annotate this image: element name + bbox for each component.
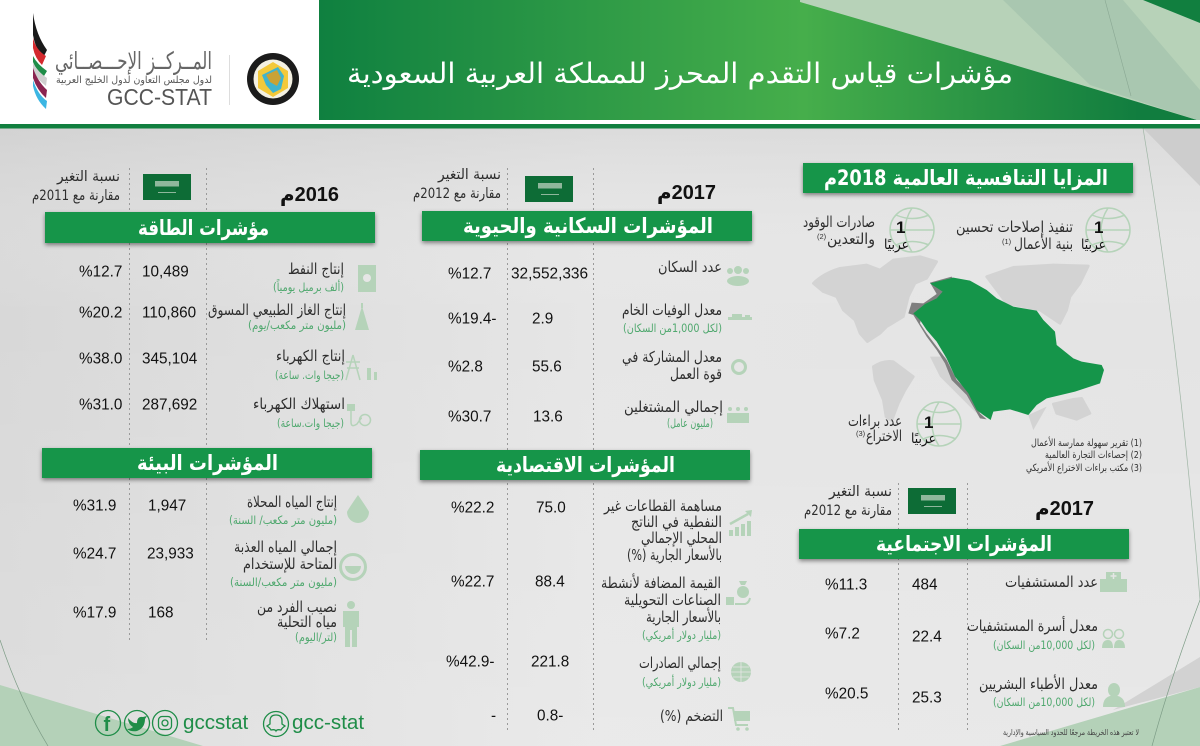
callout: patents xyxy=(848,402,961,447)
row: inflation xyxy=(491,707,750,731)
change label: نسبة التغير xyxy=(437,167,501,183)
row: fresh water: %24.7 xyxy=(73,546,116,562)
banner xyxy=(45,212,375,243)
panel: population and vital indicators xyxy=(413,167,752,431)
row: total employed: (مليون عامل) xyxy=(667,416,713,431)
logo latin name: GCC-STAT xyxy=(107,84,212,110)
row: desalinated water: (مليون متر مكعب/ السنة) xyxy=(229,513,337,528)
year: 2017م xyxy=(1035,498,1094,520)
row: non-oil sectors: المحلي الإجمالي xyxy=(641,529,722,548)
row: electricity consumption: استهلاك الكهرباء xyxy=(253,395,345,413)
row: natural gas xyxy=(79,301,369,333)
callout: business reforms xyxy=(956,208,1130,253)
banner xyxy=(42,448,372,478)
row: hospitals: %11.3 xyxy=(825,576,867,594)
icon: flag xyxy=(908,488,956,514)
callout: patents: الاختراع xyxy=(866,427,902,445)
callout: patents: عدد براءات xyxy=(848,412,902,430)
footnotes xyxy=(1026,436,1142,474)
row: fresh water: 23,933 xyxy=(147,546,194,562)
header band xyxy=(0,0,1200,128)
row: death rate: معدل الوفيات الخام xyxy=(622,301,722,319)
banner xyxy=(420,450,750,480)
row: electricity consumption: 287,692 xyxy=(142,396,197,414)
callout: fuel and mining exports: عربيًا xyxy=(884,237,909,253)
footnotes: (3) مكتب براءات الاختراع الأمريكي xyxy=(1026,461,1142,474)
row: oil production: %12.7 xyxy=(79,264,122,280)
panel: global competitive advantages xyxy=(803,163,1142,474)
row: electricity production: 345,104 xyxy=(142,350,198,368)
year: 2016م xyxy=(280,184,339,206)
row: population: %12.7 xyxy=(448,266,491,282)
row: death rate: 2.9 xyxy=(532,310,553,328)
row: value added: القيمة المضافة لأنشطة xyxy=(601,573,721,592)
row: per capita: مياه التحلية xyxy=(277,613,337,631)
callout: business reforms: (1) xyxy=(1002,237,1012,246)
row: desalinated water xyxy=(73,493,369,528)
row: population: 32,552,336 xyxy=(511,266,588,282)
row: physicians: 25.3 xyxy=(912,690,942,706)
row: electricity production: (جيجا وات. ساعة) xyxy=(275,368,344,383)
icon: facebook xyxy=(96,710,120,736)
row: exports: 221.8 xyxy=(531,654,569,670)
row: hospitals xyxy=(825,572,1127,594)
row: value added: (مليار دولار أمريكي) xyxy=(642,627,721,643)
change label xyxy=(32,169,120,204)
row: hospital beds: 22.4 xyxy=(912,628,942,646)
row: inflation: - xyxy=(491,708,496,724)
row: electricity consumption: %31.0 xyxy=(79,396,122,414)
row: non-oil sectors xyxy=(451,497,752,564)
icon: facebook: f xyxy=(104,714,110,736)
row: natural gas: (مليون متر مكعب/يوم) xyxy=(248,318,346,333)
row: electricity production: %38.0 xyxy=(79,350,122,368)
row: non-oil sectors: 75.0 xyxy=(536,500,566,516)
row: value added xyxy=(451,573,750,643)
row: hospitals: 484 xyxy=(912,576,938,594)
row: exports: %42.9- xyxy=(446,654,494,670)
row: death rate: %19.4- xyxy=(448,310,496,328)
row: per capita: (لتر/اليوم) xyxy=(295,630,337,645)
row: total employed: إجمالي المشتغلين xyxy=(624,398,723,417)
row: per capita: نصيب الفرد من xyxy=(257,598,337,616)
logo subtitle: لدول مجلس التعاون لدول الخليج العربية xyxy=(56,75,212,86)
row: oil production: إنتاج النفط xyxy=(288,260,344,279)
row: labor participation: معدل المشاركة في xyxy=(622,348,722,367)
row: exports: (مليار دولار أمريكي) xyxy=(642,674,721,690)
icon: instagram xyxy=(152,710,178,736)
row: non-oil sectors: مساهمة القطاعات غير xyxy=(603,497,722,515)
row: oil production: 10,489 xyxy=(142,264,189,280)
icon: flag xyxy=(525,176,573,202)
footnotes: (1) تقرير سهولة ممارسة الأعمال xyxy=(1031,436,1142,449)
callout: patents: 1 xyxy=(924,413,933,432)
icon: snapchat xyxy=(264,712,288,736)
banner xyxy=(799,529,1129,559)
callout: business reforms: بنية الأعمال xyxy=(1014,234,1073,253)
callout: business reforms: عربيًا xyxy=(1081,237,1106,253)
row: natural gas: 110,860 xyxy=(142,304,196,322)
panel: social indicators xyxy=(799,484,1139,738)
row: labor participation: قوة العمل xyxy=(670,365,722,383)
row: population: عدد السكان xyxy=(658,258,722,276)
callout: business reforms: 1 xyxy=(1094,218,1103,237)
callout: fuel and mining exports: 1 xyxy=(896,218,905,237)
icon: flag xyxy=(143,174,191,200)
callout: business reforms: تنفيذ إصلاحات تحسين xyxy=(956,218,1073,236)
row: per capita xyxy=(73,598,359,647)
change label xyxy=(804,484,892,519)
row: exports: إجمالي الصادرات xyxy=(639,654,721,673)
row: non-oil sectors: النفطية في الناتج xyxy=(631,513,722,532)
row: labor participation xyxy=(448,348,746,383)
row: electricity production xyxy=(79,347,377,383)
row: hospital beds: معدل أسرة المستشفيات xyxy=(967,616,1098,635)
row: desalinated water: %31.9 xyxy=(73,498,116,514)
row: fresh water xyxy=(73,538,366,590)
row: inflation: التضخم (%) xyxy=(660,707,723,725)
row: desalinated water: إنتاج المياه المحلاة xyxy=(247,493,337,512)
row: oil production: (ألف برميل يومياً) xyxy=(273,278,344,295)
row: per capita: %17.9 xyxy=(73,604,116,622)
row: electricity production: إنتاج الكهرباء xyxy=(276,347,345,366)
row: physicians: معدل الأطباء البشريين xyxy=(979,674,1098,693)
banner: المؤشرات البيئة xyxy=(137,451,278,475)
row: non-oil sectors: بالأسعار الجارية (%) xyxy=(627,545,722,564)
row: value added: الصناعات التحويلية xyxy=(624,591,721,609)
icon: twitter xyxy=(124,710,150,736)
row: natural gas: %20.2 xyxy=(79,304,122,322)
year: 2017م xyxy=(657,182,716,204)
row: physicians: (لكل 10,000من السكان) xyxy=(993,695,1095,710)
row: value added: %22.7 xyxy=(451,574,494,590)
callout: fuel and mining exports: صادرات الوقود xyxy=(803,213,875,231)
panel: environment indicators xyxy=(42,448,372,647)
footnotes: (2) إحصاءات التجارة العالمية xyxy=(1045,450,1142,461)
logo: GCC-STAT xyxy=(33,13,299,110)
row: fresh water: المتاحة للإستخدام xyxy=(243,555,337,573)
row: value added: 88.4 xyxy=(535,574,565,590)
world map with Saudi Arabia xyxy=(813,257,1104,430)
banner: المؤشرات الاجتماعية xyxy=(876,532,1052,556)
callout: patents: (3) xyxy=(856,429,866,438)
change label: نسبة التغير xyxy=(828,484,892,500)
handle: gcc-stat: gcc-stat xyxy=(292,711,364,734)
row: hospital beds xyxy=(825,616,1125,653)
row: natural gas: إنتاج الغاز الطبيعي المسوق xyxy=(208,301,346,320)
banner: المزايا التنافسية العالمية 2018م xyxy=(824,166,1108,190)
row: hospital beds: (لكل 10,000من السكان) xyxy=(993,638,1095,653)
icon: ribbon xyxy=(33,13,47,109)
row: total employed: 13.6 xyxy=(533,408,563,426)
row: total employed xyxy=(448,398,749,431)
logo arabic name: المــركــز الإحـــصــائي xyxy=(55,47,212,75)
banner: مؤشرات الطاقة xyxy=(138,216,269,240)
row: physicians: %20.5 xyxy=(825,686,868,702)
change label: مقارنة مع 2011م xyxy=(32,188,120,204)
row: non-oil sectors: %22.2 xyxy=(451,500,494,516)
row: desalinated water: 1,947 xyxy=(148,498,186,514)
row: population xyxy=(448,258,749,286)
row: per capita: 168 xyxy=(148,604,174,622)
handle: gccstat: gccstat xyxy=(183,711,249,734)
banner: المؤشرات الاقتصادية xyxy=(496,453,675,477)
callout: fuel and mining exports: والتعدين xyxy=(827,230,875,248)
row: fresh water: (مليون متر مكعب/السنة) xyxy=(230,575,337,590)
banner: المؤشرات السكانية والحيوية xyxy=(463,214,713,238)
icon: GCC emblem xyxy=(247,53,299,105)
row: electricity consumption: (جيجا وات.ساعة) xyxy=(277,416,344,431)
dashed column guides xyxy=(130,168,968,733)
row: exports xyxy=(446,654,751,690)
banner xyxy=(422,211,752,241)
row: oil production xyxy=(79,260,376,295)
row: fresh water: إجمالي المياه العذبة xyxy=(234,538,337,557)
row: death rate: (لكل 1,000من السكان) xyxy=(623,321,722,336)
callout: patents: عربيًا xyxy=(911,431,936,447)
row: total employed: %30.7 xyxy=(448,408,491,426)
row: labor participation: %2.8 xyxy=(448,358,483,376)
panel: economic indicators xyxy=(420,450,752,731)
row: hospital beds: %7.2 xyxy=(825,626,860,642)
row: inflation: 0.8- xyxy=(537,708,563,724)
social links xyxy=(96,710,364,736)
row: labor participation: 55.6 xyxy=(532,358,562,376)
row: death rate xyxy=(448,301,752,336)
panel: energy indicators xyxy=(32,169,377,431)
change label: نسبة التغير xyxy=(56,169,120,185)
row: physicians xyxy=(825,674,1125,710)
callout: fuel and mining exports xyxy=(803,208,934,253)
row: electricity consumption xyxy=(79,395,370,431)
callout: fuel and mining exports: (2) xyxy=(817,232,827,241)
change label xyxy=(413,167,501,202)
change label: مقارنة مع 2012م xyxy=(413,186,501,202)
map disclaimer: لا تعتبر هذه الخريطة مرجعًا للحدود السياسية والإدارية xyxy=(1003,728,1139,738)
row: hospitals: عدد المستشفيات xyxy=(1005,573,1098,591)
title: مؤشرات قياس التقدم المحرز للمملكة العربية السعودية xyxy=(347,57,1013,90)
row: value added: بالأسعار الجارية xyxy=(646,607,721,626)
change label: مقارنة مع 2012م xyxy=(804,503,892,519)
